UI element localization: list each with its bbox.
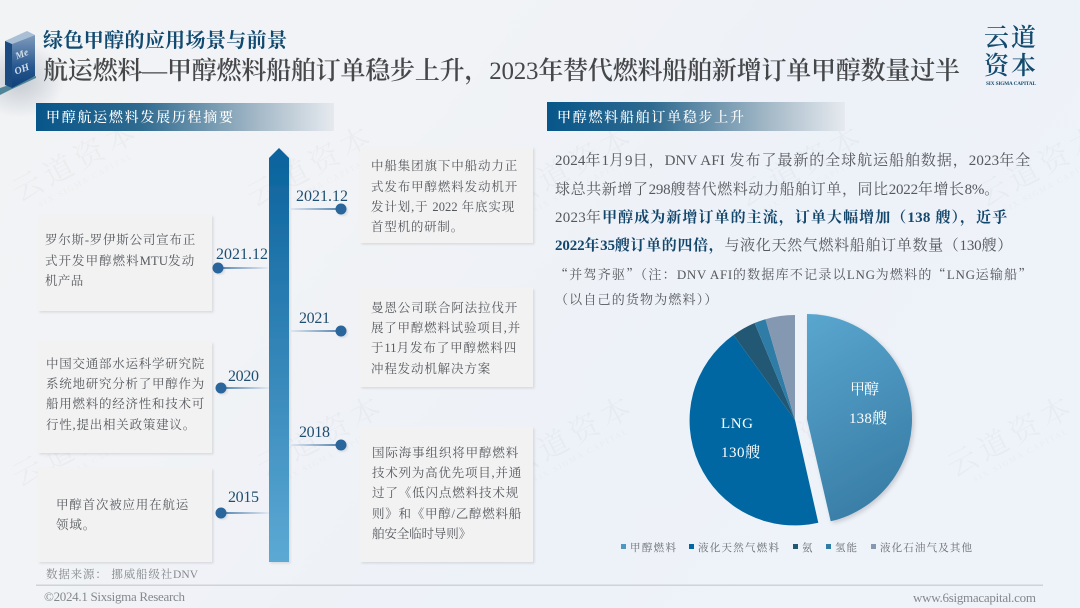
- card: first use 2015: [38, 468, 212, 562]
- logo: Six Sigma Capital: 云道: [984, 24, 1036, 52]
- text block: DNV AFI summary: 2022年35艘订单的四倍，与液化天然气燃料船舶订单数量（130艘）: [555, 236, 1013, 255]
- card: CSSC 2021.12: 式发布甲醇燃料发动机开: [371, 179, 518, 194]
- card: China transport institute 2020: 船用燃料的经济性和技术可: [46, 396, 205, 411]
- card: MAN 2021: 冲程发动机解决方案: [371, 361, 491, 376]
- icon: MeOH block: [0, 31, 65, 118]
- logo: Six Sigma Capital: 资本: [984, 52, 1036, 80]
- card: Rolls-Royce 2021.12: 罗尔斯-罗伊斯公司宣布正: [45, 232, 196, 247]
- marker: left 2021.12: [212, 246, 268, 274]
- card: China transport institute 2020: 行性,提出相关政策建议。: [46, 417, 196, 432]
- card: CSSC 2021.12: 中船集团旗下中船动力正: [371, 158, 518, 173]
- card: IMO 2018: 技术列为高优先项目,并通: [372, 465, 522, 480]
- chart: pie of new orders: [690, 314, 912, 525]
- text: SIX SIGMA CAPITAL: [532, 157, 629, 214]
- text: 云道资本: [242, 121, 377, 214]
- text: 云道资本: [942, 391, 1077, 484]
- card: China transport institute 2020: 系统地研究分析了甲醇作为: [46, 376, 205, 391]
- heading bar: orders: [547, 102, 845, 131]
- card: Rolls-Royce 2021.12: [38, 215, 212, 311]
- label: methanol 138: 138艘: [849, 410, 887, 427]
- panel: methanol shipping fuel history: [36, 103, 533, 562]
- text: 云道资本: [732, 391, 867, 484]
- card: MAN 2021: 曼恩公司联合阿法拉伐开: [371, 300, 518, 315]
- legend: 氢能: [835, 541, 857, 554]
- text block: DNV AFI summary: 2023年甲醇成为新增订单的主流，订单大幅增加（138 艘），近乎: [555, 208, 1008, 227]
- logo: Six Sigma Capital: SIX SIGMA CAPITAL: [986, 81, 1037, 87]
- marker: 2015: [216, 489, 269, 518]
- card: China transport institute 2020: [38, 342, 212, 453]
- icon: MeOH block: OH: [13, 61, 32, 78]
- marker: 2020: [216, 368, 269, 394]
- text: 云道资本: [252, 391, 387, 484]
- card: first use 2015: 甲醇首次被应用在航运: [56, 497, 189, 512]
- text: 云道资本: [7, 116, 142, 209]
- card: CSSC 2021.12: 首型机的研制。: [371, 219, 464, 234]
- card: IMO 2018: 则》和《甲醇/乙醇燃料船: [372, 506, 522, 521]
- label: LNG 130: [721, 416, 760, 461]
- marker: 2021: [289, 310, 346, 336]
- text: SIX SIGMA CAPITAL: [282, 427, 379, 484]
- card: MAN 2021: [360, 288, 533, 387]
- label: methanol 138: [849, 381, 887, 427]
- text block: DNV AFI summary: “并驾齐驱”（注：DNV AFI的数据库不记录以LNG为燃料的“LNG运输船”: [555, 264, 1032, 283]
- text block: DNV AFI summary: （以自己的货物为燃料））: [555, 292, 718, 307]
- legend: [621, 541, 972, 554]
- logo: Six Sigma Capital: [984, 24, 1037, 87]
- legend: 甲醇燃料: [630, 541, 676, 554]
- label: LNG 130: 130艘: [721, 444, 760, 461]
- card: first use 2015: 领域。: [56, 517, 96, 532]
- timeline arrow: [269, 148, 289, 562]
- marker: left 2021.12: 2021.12: [216, 246, 268, 263]
- text: 云道资本: [502, 121, 637, 214]
- label: methanol 138: 甲醇: [850, 381, 879, 398]
- text: SIX SIGMA CAPITAL: [37, 152, 134, 209]
- card: IMO 2018: 过了《低闪点燃料技术规: [372, 485, 519, 500]
- card: China transport institute 2020: 中国交通部水运科学研究院: [46, 356, 205, 371]
- marker: right 2021.12: [289, 188, 348, 214]
- card: IMO 2018: [360, 427, 533, 562]
- marker: right 2021.12: 2021.12: [296, 188, 348, 205]
- text: SIX SIGMA CAPITAL: [762, 427, 859, 484]
- card: CSSC 2021.12: [360, 147, 533, 243]
- marker: 2018: 2018: [299, 424, 330, 441]
- text: 云道资本: [502, 391, 637, 484]
- marker: 2021: 2021: [299, 310, 330, 327]
- title: main headline: 航运燃料—甲醇燃料船舶订单稳步上升，2023年替代燃料船舶新增订单甲醇数量过半: [43, 51, 960, 87]
- label: LNG 130: LNG: [721, 416, 753, 432]
- card: CSSC 2021.12: 发计划,于 2022 年底实现: [371, 199, 515, 214]
- legend: 氨: [802, 541, 813, 554]
- card: MAN 2021: 展了甲醇燃料试验项目,并: [371, 320, 521, 335]
- legend: 液化天然气燃料: [698, 541, 780, 554]
- slice: methanol: [807, 314, 912, 521]
- slice: hydrogen: [755, 319, 795, 420]
- marker: 2020: 2020: [228, 368, 259, 385]
- panel: methanol ship orders: [547, 102, 1032, 554]
- card: Rolls-Royce 2021.12: 机产品: [45, 273, 84, 288]
- text: SIX SIGMA CAPITAL: [272, 157, 369, 214]
- text: SIX SIGMA CAPITAL: [972, 427, 1069, 484]
- slice: ammonia: [734, 323, 795, 420]
- text: 云道资本: [732, 121, 867, 214]
- heading bar: history: 甲醇航运燃料发展历程摘要: [46, 109, 233, 126]
- heading bar: orders: 甲醇燃料船舶订单稳步上升: [557, 109, 744, 126]
- title: section heading: 绿色甲醇的应用场景与前景: [43, 29, 288, 52]
- marker: 2018: [289, 424, 346, 450]
- card: MAN 2021: 于11月发布了甲醇燃料四: [371, 340, 517, 355]
- text: 云道资本: [7, 401, 142, 494]
- text: SIX SIGMA CAPITAL: [37, 437, 134, 494]
- footer: website: www.6sigmacapital.com: [913, 590, 1036, 605]
- card: IMO 2018: 国际海事组织将甲醇燃料: [372, 445, 519, 460]
- card: IMO 2018: 舶安全临时导则》: [372, 526, 472, 541]
- icon: MeOH block: Me: [13, 47, 31, 63]
- card: Rolls-Royce 2021.12: 式开发甲醇燃料MTU发动: [45, 253, 195, 268]
- footer: copyright: ©2024.1 Sixsigma Research: [44, 589, 186, 604]
- text: SIX SIGMA CAPITAL: [532, 427, 629, 484]
- legend: 液化石油气及其他: [880, 541, 972, 554]
- slice: LNG: [690, 335, 818, 525]
- text block: DNV AFI summary: [555, 151, 1032, 307]
- slice: LPG and others: [766, 315, 795, 420]
- heading bar: history: [36, 103, 334, 131]
- marker: 2015: 2015: [228, 489, 259, 506]
- text block: DNV AFI summary: 球总共新增了298艘替代燃料动力船舶订单，同比2022年增长8%。: [555, 180, 1000, 198]
- text block: DNV AFI summary: 2024年1月9日，DNV AFI 发布了最新的全球航运船舶数据，2023年全: [555, 151, 1031, 169]
- text: SIX SIGMA CAPITAL: [762, 157, 859, 214]
- source note: 数据来源： 挪威船级社DNV: [46, 567, 199, 581]
